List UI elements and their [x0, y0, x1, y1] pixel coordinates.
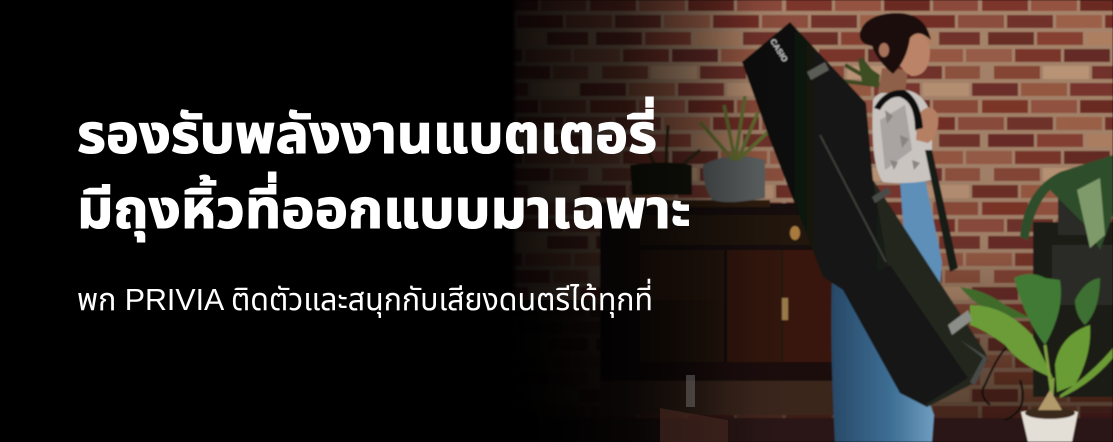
photo scene — [500, 0, 1113, 442]
dark side table — [1033, 222, 1113, 397]
fern plant — [1020, 155, 1113, 250]
face — [898, 30, 930, 76]
subheading: พก PRIVIA ติดตัวและสนุกกับเสียงดนตรีได้ทุกที่ — [77, 278, 653, 318]
hair — [860, 13, 931, 74]
blouse — [872, 90, 932, 183]
headline line 1: รองรับพลังงานแบตเตอรี่ — [77, 97, 657, 165]
potted plant on cabinet — [630, 96, 770, 202]
strap — [874, 90, 923, 130]
neck — [878, 68, 908, 93]
hand — [916, 108, 938, 143]
bottom-left floor shadow — [500, 300, 730, 442]
large leaf plant — [960, 274, 1113, 442]
headline line 2: มีถุงหิ้วที่ออกแบบมาเฉพาะ — [77, 172, 691, 242]
foreground box on floor — [660, 375, 728, 442]
dark plant behind bag — [835, 58, 880, 88]
skirt — [831, 276, 934, 442]
ear — [879, 43, 889, 57]
woman — [831, 13, 958, 442]
floor — [500, 418, 1113, 442]
plant pot — [1021, 408, 1078, 442]
keyboard bag — [742, 22, 988, 407]
wooden cabinet — [600, 200, 850, 415]
cables — [982, 345, 1023, 420]
headline — [77, 97, 691, 242]
background: brick wall — [500, 0, 1113, 442]
bag logo: CASIO — [768, 37, 789, 64]
